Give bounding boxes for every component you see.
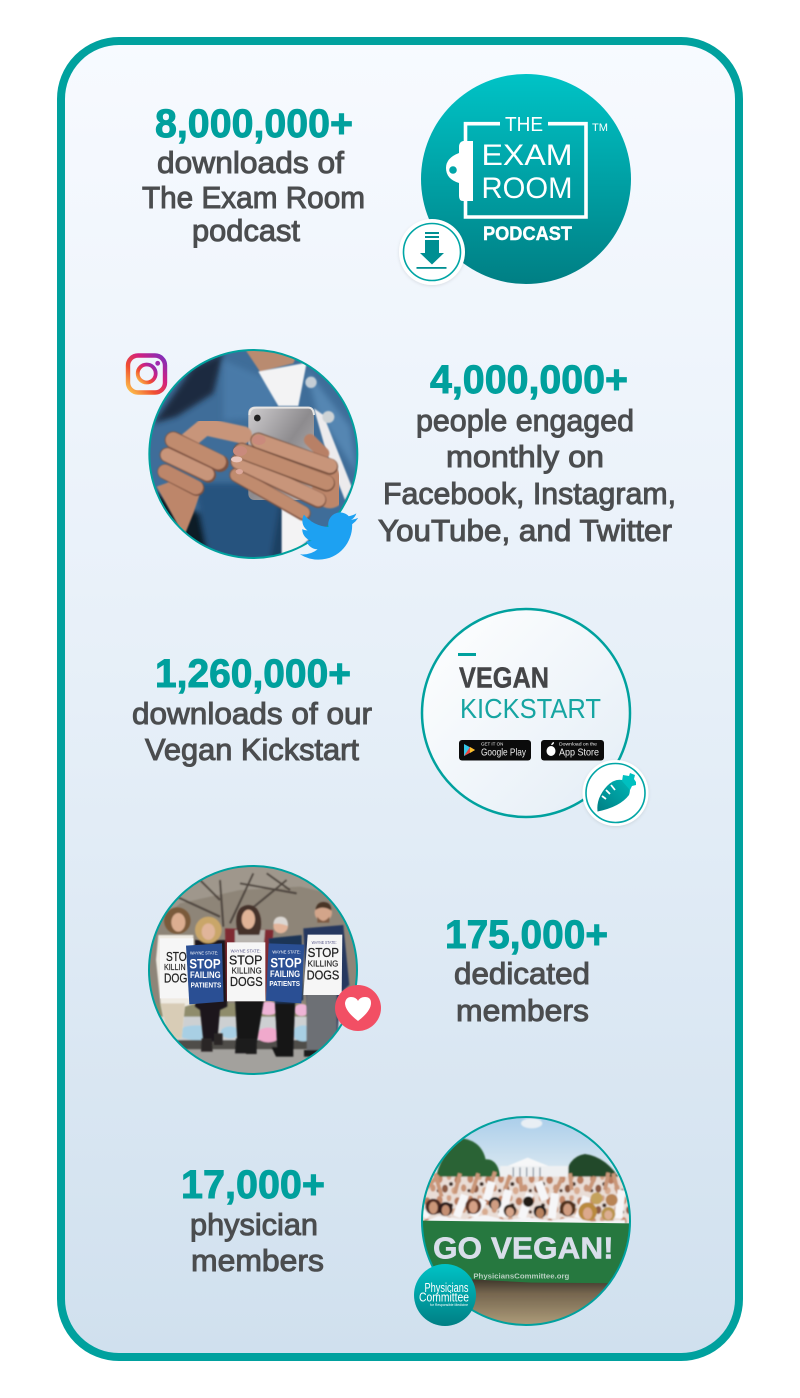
protest signs	[160, 935, 342, 1004]
stat: social engagement: Facebook, Instagram,	[383, 476, 676, 511]
stat: social engagement: 4,000,000+	[430, 358, 628, 402]
protest signs: PATIENTS	[269, 979, 300, 988]
stat: Vegan Kickstart downloads: 1,260,000+	[155, 652, 351, 696]
protest signs: WAYNE STATE:	[231, 948, 261, 953]
logo: Physicians Committee badge: Physicians	[424, 1281, 468, 1295]
stat: members: members	[456, 993, 589, 1028]
stat: social engagement: people engaged	[416, 403, 634, 438]
button: App Store	[541, 740, 604, 760]
stat: Vegan Kickstart downloads	[132, 652, 372, 767]
protest signs: STOP	[229, 952, 262, 967]
protest signs: STOP	[308, 945, 339, 960]
stat: social engagement	[378, 358, 676, 548]
icon: Exam Room podcast logo: THE	[505, 114, 543, 136]
protest signs: PATIENTS	[191, 981, 221, 990]
icon: Exam Room podcast logo: ROOM	[482, 172, 572, 205]
protest signs: KILLING	[232, 966, 262, 976]
stat: podcast downloads: podcast	[192, 213, 300, 248]
icon: heart badge	[335, 985, 381, 1031]
banner: GO VEGAN!	[433, 1231, 614, 1266]
icon: Exam Room podcast logo	[421, 74, 631, 284]
button: App Store: App Store	[559, 746, 599, 758]
button: Google Play	[459, 740, 531, 760]
banner	[422, 1221, 630, 1283]
icon: Instagram	[128, 356, 165, 392]
icon: Twitter bird	[300, 512, 358, 560]
stat: podcast downloads	[142, 102, 365, 248]
logo: Physicians Committee badge: Committee	[419, 1290, 469, 1304]
stat: podcast downloads: downloads of	[157, 145, 344, 180]
stat: Vegan Kickstart downloads: downloads of our	[132, 696, 372, 731]
icon: Exam Room podcast logo: PODCAST	[483, 224, 572, 245]
protest signs: WAYNE STATE:	[272, 949, 301, 954]
protest signs: WAYNE STATE:	[312, 940, 337, 945]
banner: PhysiciansCommittee.org	[473, 1271, 569, 1280]
stat: members	[445, 913, 608, 1028]
right hand fingers	[310, 440, 323, 453]
stat: Vegan Kickstart downloads: Vegan Kickstart	[145, 732, 359, 767]
background panel	[61, 41, 739, 1357]
icon: download badge	[399, 219, 465, 285]
protest signs: STO	[166, 950, 187, 964]
logo: Vegan Kickstart app: VEGAN	[459, 662, 549, 694]
stat: members: 175,000+	[445, 913, 608, 957]
stat: podcast downloads: 8,000,000+	[155, 102, 353, 146]
icon: carrot badge	[582, 760, 648, 826]
protest signs: FAILING	[190, 970, 221, 980]
protest signs: FAILING	[270, 969, 300, 979]
protest signs: DOG	[164, 971, 187, 985]
protest signs: KILLING	[308, 959, 339, 969]
protest signs: KILLIN	[164, 963, 186, 972]
protest signs: STOP	[270, 954, 302, 970]
logo: Vegan Kickstart app	[422, 609, 630, 817]
stat: social engagement: monthly on	[446, 439, 604, 474]
stat: podcast downloads: The Exam Room	[142, 180, 365, 215]
button: Google Play: GET IT ON	[481, 742, 503, 746]
stat: social engagement: YouTube, and Twitter	[378, 513, 672, 548]
stat: physician members: members	[191, 1243, 324, 1278]
protest signs: DOGS	[307, 967, 340, 982]
stat: members: dedicated	[454, 956, 590, 991]
photo: hands holding a phone	[147, 347, 363, 563]
people	[156, 902, 349, 1057]
button: Google Play: Google Play	[481, 746, 527, 758]
button: App Store: Download on the	[559, 742, 598, 746]
stat: physician members	[181, 1163, 325, 1278]
logo: Physicians Committee badge	[414, 1264, 476, 1326]
stat: physician members: physician	[190, 1207, 318, 1242]
photo: Go Vegan rally	[418, 1115, 635, 1328]
left hand and forearm	[157, 480, 200, 537]
stat: physician members: 17,000+	[181, 1163, 325, 1207]
photo: protest with signs	[147, 863, 360, 1079]
protest signs: STOP	[189, 955, 221, 971]
icon: Exam Room podcast logo: TM	[592, 122, 608, 134]
icon: Exam Room podcast logo: EXAM	[482, 139, 572, 172]
logo: Vegan Kickstart app: KICKSTART	[460, 693, 601, 724]
protest signs: WAYNE STATE:	[190, 950, 218, 955]
logo: Physicians Committee badge: for Responsible Medicine	[430, 1303, 468, 1307]
protest signs: DOGS	[230, 974, 263, 989]
